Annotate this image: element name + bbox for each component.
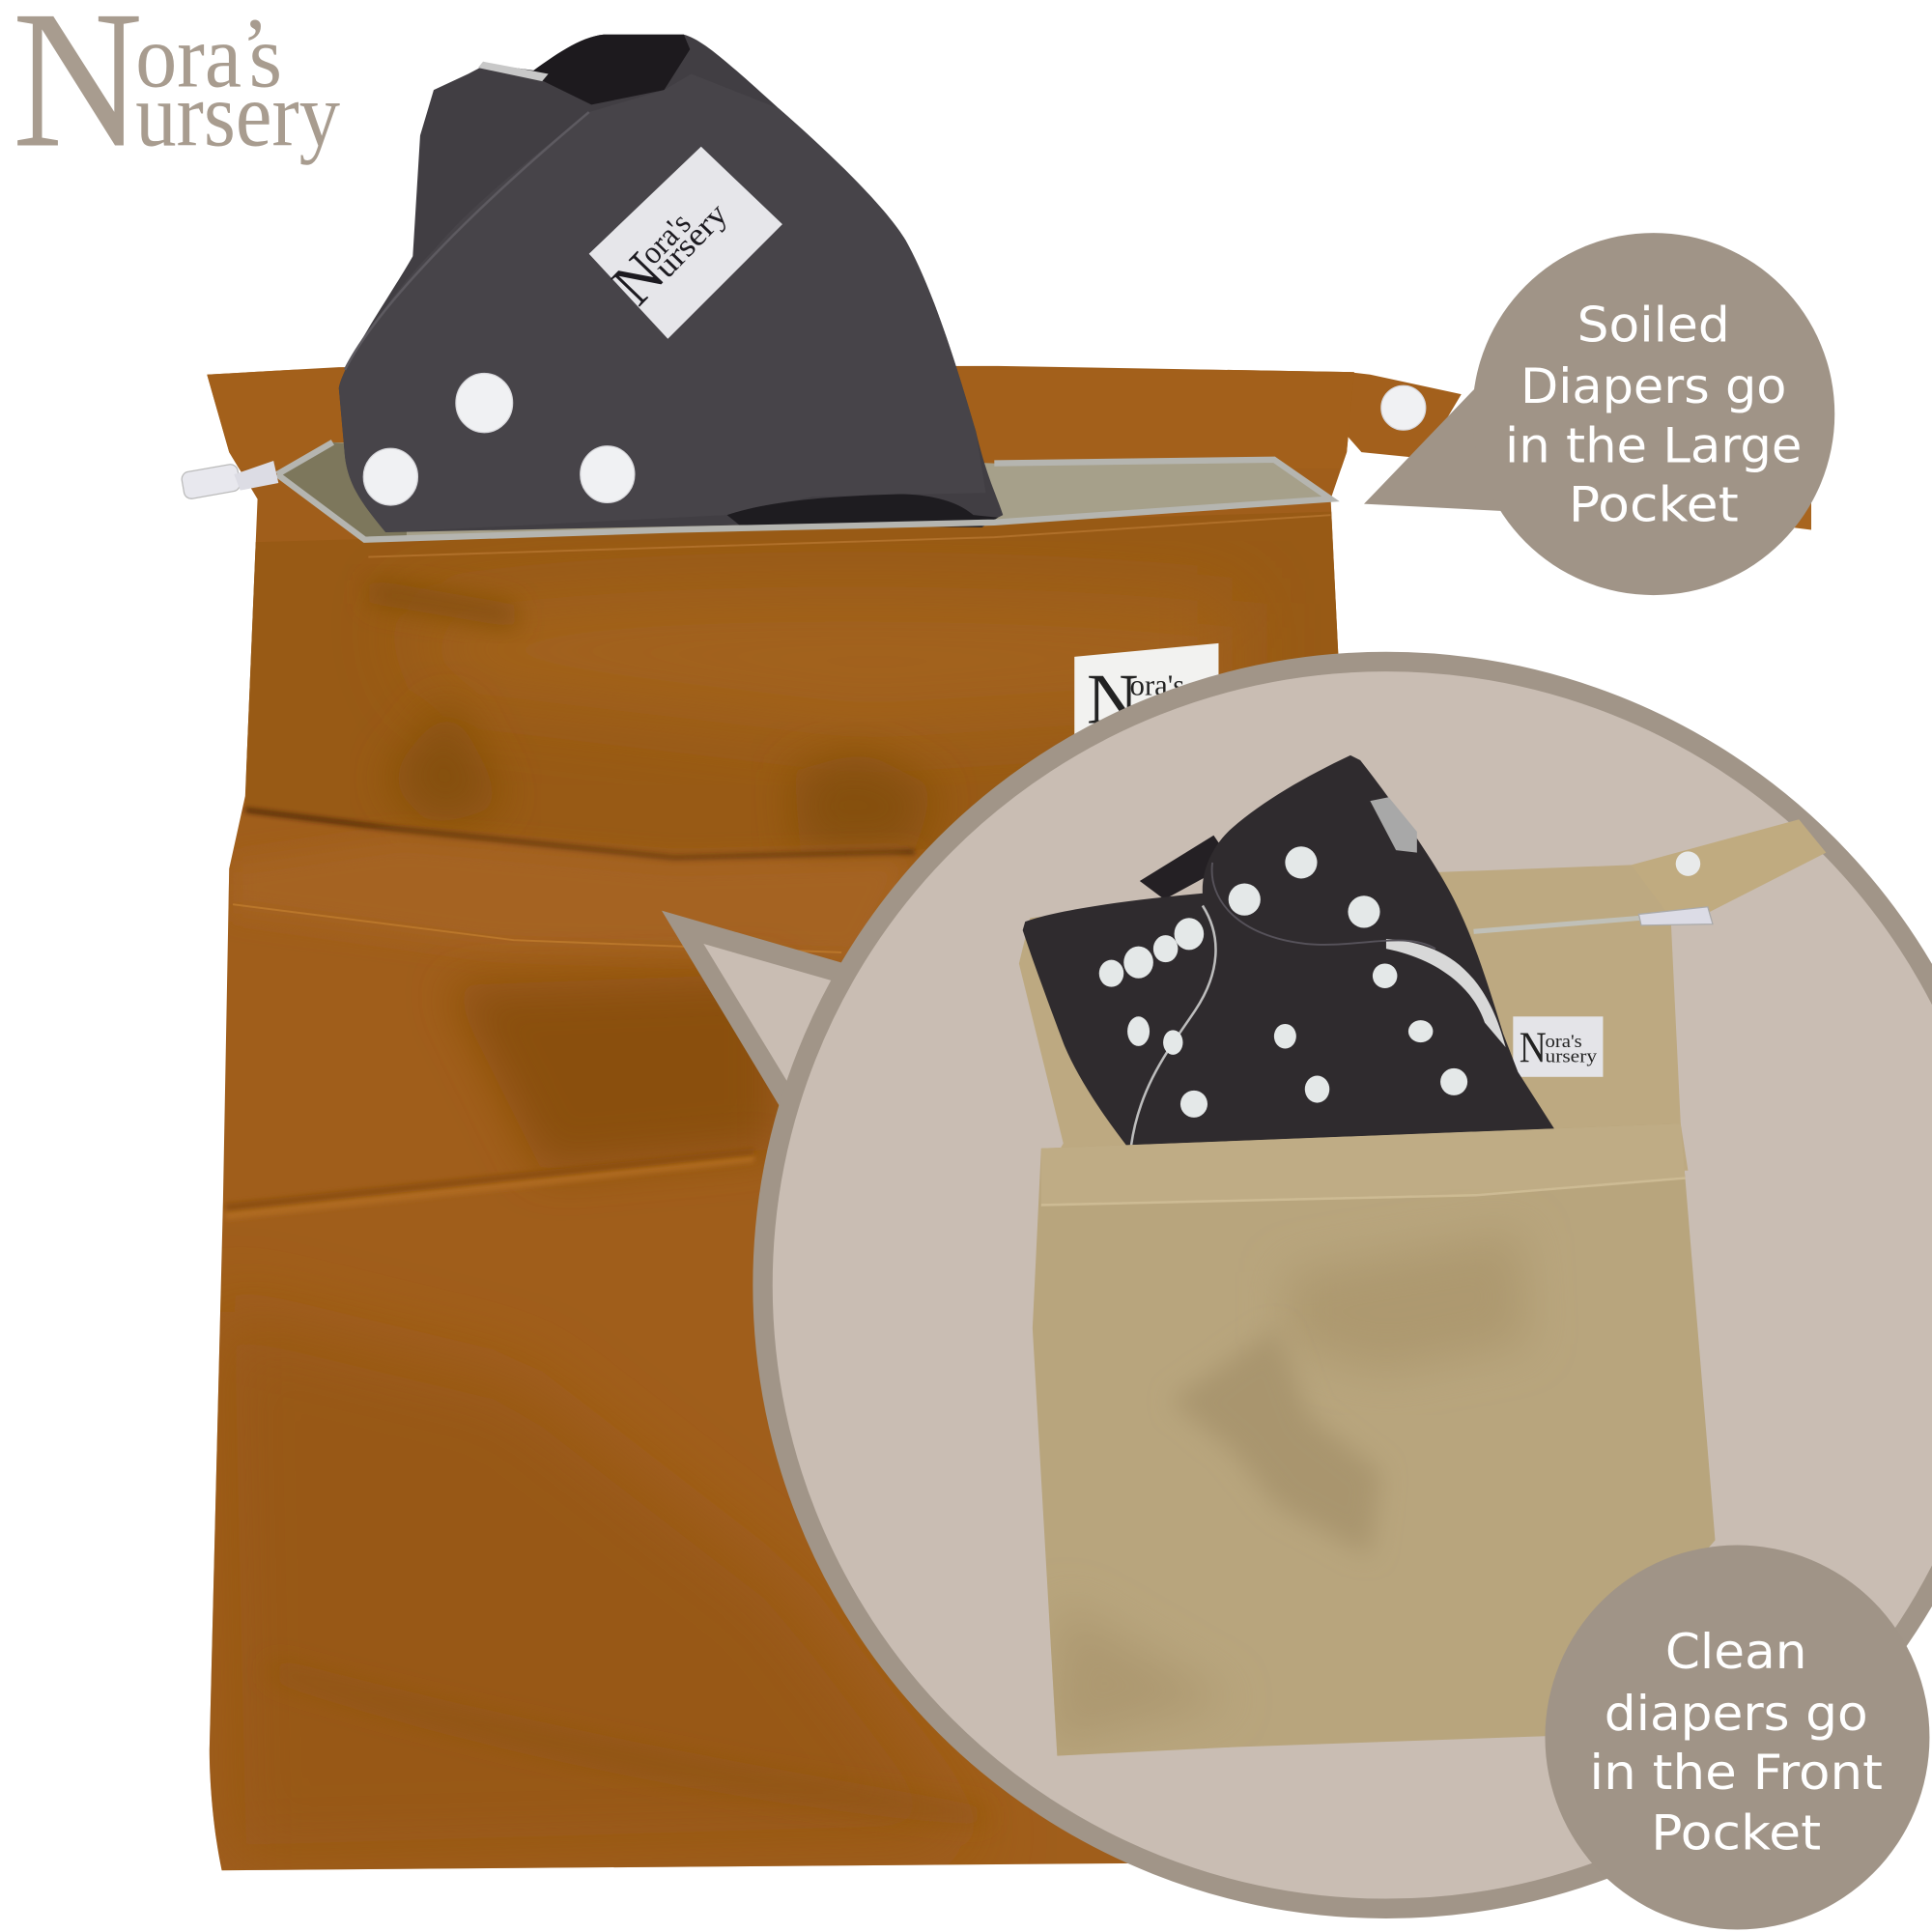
small diaper trim (1131, 906, 1216, 1146)
zipper (277, 442, 1331, 540)
small diaper elastic (1140, 836, 1233, 899)
tan bag label text: ora's (1545, 1032, 1582, 1052)
diaper elastic (528, 35, 690, 104)
bubble text (1505, 297, 1802, 533)
bubble tail (1364, 379, 1509, 511)
circle (763, 662, 1932, 1909)
diaper under lining (727, 494, 998, 527)
bag opening (277, 442, 1331, 540)
tan zipper (1474, 918, 1641, 931)
bag label (1074, 643, 1218, 752)
logo: ora (135, 7, 242, 105)
small diaper snaps (1099, 846, 1467, 1118)
bag stitch lines (233, 904, 841, 952)
small diaper label (1370, 797, 1417, 853)
diaper flap edge (345, 112, 589, 370)
diaper back panel (339, 35, 1003, 532)
bubble text: in the Large (1505, 417, 1802, 473)
diaper label text: ora's (633, 206, 698, 271)
diaper label (589, 147, 782, 339)
bubble text: in the Front (1589, 1745, 1883, 1801)
bubble text: Clean (1665, 1624, 1807, 1680)
bubble text (1589, 1624, 1883, 1861)
zipper pull (181, 461, 278, 499)
diaper label text: ursery (647, 196, 735, 285)
bag label text: ora's (1130, 668, 1184, 701)
opening shadow (277, 442, 407, 540)
diaper snaps (363, 373, 1426, 505)
bag tab right (1343, 372, 1462, 458)
logo: s (249, 7, 282, 105)
tan bag (1019, 755, 1826, 1756)
bag shading (207, 370, 1355, 1870)
small diaper flap lining (1386, 939, 1506, 1047)
bag sliver behind bubble (1762, 487, 1811, 529)
tan bag tab (1632, 819, 1826, 922)
tan bag label text: N (1520, 1022, 1547, 1071)
bubble: soiled diapers (1364, 233, 1834, 595)
diaper waist trim (478, 62, 549, 81)
logo: ursery (135, 66, 340, 166)
bubble circle (1545, 1545, 1929, 1929)
inset circle callout (662, 662, 1932, 1909)
bag body (207, 366, 1355, 1870)
tan bag label (1513, 1016, 1603, 1077)
tan snap (1676, 851, 1700, 876)
tan zipper pull (1638, 907, 1713, 925)
small diaper (1023, 755, 1555, 1149)
bubble text: diapers go (1605, 1686, 1868, 1742)
bubble: clean diapers (1545, 1545, 1929, 1929)
bubble text: Pocket (1569, 477, 1739, 533)
pointer (662, 911, 887, 1122)
tan bag back panel (1019, 865, 1688, 1171)
diaper label text: N (599, 240, 677, 318)
bag label text: N (1087, 661, 1138, 740)
logo (13, 0, 340, 189)
bubble text: Pocket (1651, 1805, 1821, 1861)
bubble text: Diapers go (1520, 358, 1786, 414)
pointer inner (703, 944, 863, 1104)
bag lower shading (229, 838, 914, 961)
front pocket shading (1041, 1123, 1687, 1749)
diaper label text (599, 177, 738, 318)
bubble circle (1472, 233, 1834, 595)
front pocket (1033, 1123, 1716, 1756)
tan bag label text: ursery (1545, 1046, 1598, 1066)
logo: ’ (242, 3, 269, 93)
small diaper flap edge (1212, 863, 1435, 949)
bag label text (1087, 661, 1184, 740)
bubble text: Soiled (1577, 297, 1730, 353)
diaper flap (339, 74, 985, 532)
tan bag label text (1520, 1022, 1598, 1071)
